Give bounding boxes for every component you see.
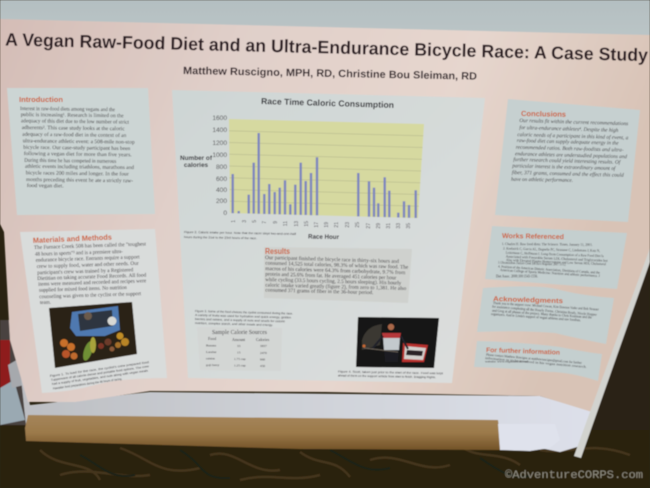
- text: references: 2. Koebnick C, Garcia AL, Dagnelie PC, Strassner C, Lindemans J, Katz N,: [503, 247, 600, 254]
- text: acknowledgments body: [491, 301, 600, 322]
- table: sample calorie sources: Banana: [206, 344, 217, 348]
- table: sample calorie sources: 3837: [260, 344, 267, 348]
- x axis labels: 35: [406, 223, 412, 229]
- text: methods body: crew to supply food, water and other needs. Our: [37, 260, 139, 270]
- x axis labels: 19: [324, 222, 330, 228]
- panel: for further information: [474, 341, 602, 381]
- white display pole: [574, 248, 650, 458]
- text: conclusions body: raw-food diet can supply adequate energy in the: [517, 137, 619, 147]
- text: conclusions body: caloric needs of a participant in this kind of event, a: [517, 131, 629, 141]
- title: A Vegan Raw-Food Diet and an Ultra-Endurance Bicycle Race: A Case Study: [5, 30, 648, 65]
- figure 1 caption: Tupperware of all calorie-dense and portable food options. The crew: [51, 364, 150, 382]
- text: references: Leitzmann C, Hoffmann I. Long-Term Consumption of a Raw Food Diet Is: [506, 251, 604, 259]
- text: further information body: website: www.veganhealth.com: [485, 360, 528, 364]
- text: introduction body: following a vegan diet for more than five years.: [24, 150, 132, 158]
- text: references: [496, 242, 608, 278]
- table: sample calorie sources: 960: [260, 358, 265, 362]
- table: sample calorie sources: Food: [208, 336, 216, 341]
- y axis labels: 1400: [212, 127, 227, 134]
- x axis labels: 13: [294, 221, 300, 227]
- text: introduction body: Interest in raw-food diets among vegans and the: [20, 105, 116, 113]
- text: results body: while cycling (33.5 hours cycling, 2.5 hours sleeping). His hourly: [265, 276, 402, 287]
- text: methods body: Dietitian on taking accurate Food Records. All food: [37, 272, 147, 282]
- text: acknowledgments body: Thank you to the support crew: Michael Cowan, Kim Dawson Vader and Bob Strasser: [493, 301, 600, 313]
- x axis labels: 11: [283, 221, 289, 226]
- table: sample calorie sources: goji berry: [206, 363, 220, 367]
- y axis labels: [212, 115, 227, 217]
- panel: materials and methods: [20, 229, 167, 393]
- y axis labels: 800: [216, 164, 227, 171]
- text: introduction body: athletic events including triathlons, marathons and: [25, 164, 134, 171]
- text: introduction body: public is increasing¹. Research is limited on the: [21, 112, 124, 119]
- text: methods body: endurance bicycle race. Entrants require a support: [36, 254, 140, 264]
- text: references: 1. Charles H. Raw food diets: The Science. Times. January 11, 2001.: [502, 242, 593, 248]
- text: introduction body: bicycle race. Our case-study participant has been: [23, 145, 131, 152]
- y axis labels: 200: [216, 198, 227, 205]
- text: results body: macros of his calories were 64.3% from carbohydrate, 9.7% from: [265, 265, 406, 276]
- text: conclusions body: Our results fit within the current recommendations: [519, 117, 628, 127]
- text: introduction body: adherents². This case study looks at the caloric: [22, 125, 125, 132]
- figure 3 caption: nutrition, complex starch, and other meals and energy.: [195, 321, 273, 327]
- figure 1 caption: had a supply of fruit, vegetables, and nuts along with vegan meals: [52, 368, 149, 386]
- text: further information body: information or to be involved in his vegan nutrition research.: [485, 356, 587, 369]
- text: introduction body: adequacy of this diet due to the low number of strict: [21, 117, 130, 126]
- x axis labels: 23: [345, 222, 351, 228]
- text: results body: caloric intake varied greatly (figure 2), from zero to 1,381. He also: [265, 282, 407, 292]
- heading: conclusions: Conclusions: [521, 109, 566, 119]
- text: methods body: items were measured and recorded and recipes were: [38, 278, 147, 288]
- table: sample calorie sources: 1.25 cup: [234, 364, 246, 368]
- x axis labels: 7: [262, 221, 268, 224]
- x axis labels: 33: [396, 223, 402, 229]
- figure 2 caption: Figure 2. Caloric intake per hour. Note that the racer slept two-and-one-half: [184, 230, 296, 236]
- y axis title: Number of: [180, 155, 213, 162]
- x axis labels: 15: [304, 221, 310, 227]
- figure 1: food photo: [49, 302, 137, 368]
- wall background: [0, 0, 650, 60]
- table: sample calorie sources: 15: [237, 350, 241, 354]
- dark room at right: [570, 245, 650, 430]
- text: acknowledgments body: and Greg at all phases of the project. Many thanks to Chris Kostman and the: [492, 309, 592, 319]
- heading: acknowledgments: Acknowledgments: [493, 296, 563, 305]
- text: conclusions body: for ultra-endurance athletes⁴. Despite the high: [519, 124, 619, 134]
- table: sample calorie sources: 1.75 cup: [234, 357, 246, 361]
- x axis labels: [231, 220, 412, 229]
- figure 1 caption: [50, 360, 150, 390]
- figure 2 caption: hours during the 21st to the 23rd hours of the race.: [184, 235, 257, 240]
- paper roll end: [498, 424, 560, 451]
- x axis labels: 1: [231, 220, 237, 223]
- lower left background clutter: [0, 320, 26, 425]
- panel: acknowledgments: [477, 286, 614, 344]
- chart: race time caloric consumption: [180, 96, 424, 241]
- figure 1 caption: Hawaiian food preparations during the 48 hours of racing.: [53, 377, 123, 390]
- text: methods body: team.: [40, 300, 51, 306]
- hanging paper below poster: [17, 340, 595, 452]
- text: methods body: 48 hours in sports"³ and is a premiere ultra-: [35, 249, 123, 258]
- x axis labels: 21: [334, 222, 340, 228]
- x axis labels: 9: [273, 221, 279, 224]
- y axis labels: 1200: [212, 140, 227, 147]
- figure 3 caption: Figure 3. Some of the food choices the cyclist consumed during the race.: [195, 309, 293, 316]
- text: methods body: [34, 241, 147, 306]
- text: results body: protein and 25.6% from fat. He averaged 451 calories per hour: [265, 271, 397, 281]
- bars: [233, 133, 416, 218]
- table: sample calorie sources: Larabar: [206, 350, 217, 354]
- text: results body: consumed 14,525 total calories, 98.3% of which was raw food. The: [265, 260, 409, 271]
- panel: works referenced: [485, 226, 627, 289]
- watermark: ©AdventureCORPS.com: [505, 470, 643, 482]
- x axis labels: 5: [252, 220, 258, 223]
- table: sample calorie sources: [197, 327, 282, 371]
- text: acknowledgments body: organizers. And to Linda's support of vegan athletes and raw foodists.: [491, 312, 581, 322]
- heading: results: Results: [265, 247, 290, 256]
- table: sample calorie sources: Calories: [256, 337, 270, 342]
- panel: introduction: [7, 88, 155, 215]
- table: sample calorie sources: Sample Calorie Sources: [212, 330, 268, 336]
- x axis labels: 31: [386, 223, 392, 229]
- y axis title: calories: [184, 162, 209, 169]
- text: introduction body: ultra-endurance athletic event: a 508-mile non-stop: [23, 138, 135, 146]
- plot area: [229, 119, 424, 218]
- text: introduction body: months preceding this event he ate a strictly raw-: [26, 177, 133, 184]
- y axis labels: 1600: [212, 115, 227, 122]
- figure 3 caption: A variety of fruits was used for hydration and quick energy, golden: [195, 313, 291, 320]
- results box: [264, 247, 412, 303]
- text: references: American College of Sports Medicine: Nutrition and athletic performance. J: [500, 268, 601, 278]
- figure 4: cyclist photo: [356, 317, 439, 368]
- y axis title: [180, 155, 213, 169]
- text: references: Also with Elevated Plasma Homocysteine and Low Serum HDL Cholesterol: [506, 258, 606, 266]
- x axis labels: 25: [355, 222, 361, 228]
- text: introduction body: food vegan diet.: [27, 182, 64, 189]
- text: conclusions body: particular interest is the extraordinary amount of: [511, 162, 617, 172]
- text: introduction body: During this time he has competed in numerous: [24, 158, 116, 165]
- text: conclusions body: further research could yield interesting results. Of: [513, 156, 622, 166]
- table: sample calorie sources: Amount: [232, 337, 246, 342]
- text: results body: Our participant finished the bicycle race in thirty-six hours and: [265, 254, 399, 265]
- authors: Matthew Ruscigno, MPH, RD, Christine Bou Sleiman, RD: [183, 65, 478, 83]
- x axis labels: 29: [376, 223, 382, 229]
- y axis labels: 1000: [212, 152, 227, 159]
- y axis labels: 600: [216, 176, 227, 183]
- table: sample calorie sources: 2470: [260, 351, 267, 355]
- figure 3 caption: [195, 309, 293, 327]
- text: conclusions body: fiber, 371 grams, consumed and the effect this could: [512, 169, 624, 179]
- table: sample calorie sources: 450: [260, 364, 265, 368]
- heading: introduction: Introduction: [19, 95, 63, 104]
- text: conclusions body: [511, 117, 629, 184]
- panel: results and chart: [172, 90, 485, 383]
- carpet floor: [0, 410, 650, 488]
- text: results body: consumed 371 grams of fiber in the 36-hour period.: [265, 287, 373, 296]
- text: methods body: supplied for mixed food items. No nutrition: [39, 284, 127, 294]
- x axis title: Race Hour: [308, 234, 340, 241]
- table: sample calorie sources: 33: [237, 344, 241, 348]
- text: conclusions body: have on athletic performance.: [511, 176, 573, 184]
- figure 4 caption: Figure 4. Scott, taken just prior to the start of the race. Food was kept: [338, 370, 443, 375]
- text: conclusions body: endurance athletes are understudied populations and: [515, 151, 627, 160]
- text: methods body: The Furnace Creek 508 has been called the "toughest: [34, 241, 146, 251]
- text: references: Diet Assoc. 2000;100:1543-1556.: [496, 274, 538, 278]
- x axis labels: 3: [242, 220, 248, 223]
- figure 1 caption: Figure 1. To load for the race, the cyclist's crew prepared food: [50, 360, 150, 378]
- figure 2 caption: [184, 230, 296, 240]
- y axis labels: 0: [223, 210, 227, 217]
- cardboard tube: [25, 415, 502, 450]
- x axis labels: 17: [314, 222, 320, 228]
- text: introduction body: bicycle races 200 miles and longer. In the four: [26, 169, 129, 178]
- text: results body: [265, 254, 409, 296]
- text: conclusions body: recommended ratios. Both raw-foodists and ultra-: [516, 144, 624, 154]
- text: references: 3. Ultramarathon. Furnace Creek 508 Race Magazine. 2007: 11-12.: [498, 261, 566, 267]
- table: sample calorie sources: raisins: [206, 356, 216, 360]
- text: introduction body: adequacy of a raw-food diet in the context of an: [22, 131, 127, 139]
- figure 4 caption: [338, 370, 443, 379]
- heading: for further information: For further information: [486, 347, 560, 357]
- text: references: 4. Position of the American Dietetic Association, Dietitians of Canada, and the: [498, 265, 600, 276]
- figure 3 caption: berries and raisins, and a supply of nuts and seeds for calorie: [195, 317, 285, 323]
- panel: conclusions: [495, 99, 640, 222]
- chart title: Race Time Caloric Consumption: [261, 96, 394, 110]
- text: methods body: participant's crew was trained by a Registered: [37, 267, 134, 276]
- y axis labels: 400: [216, 187, 227, 194]
- heading: works referenced: Works Referenced: [502, 233, 564, 241]
- text: introduction body: [20, 105, 135, 189]
- x axis labels: 27: [366, 223, 372, 229]
- heading: materials and methods: Materials and Methods: [33, 233, 112, 245]
- figure 4 caption: ahead of them on the support vehicle from start to finish. Bragging Rights.: [338, 374, 436, 379]
- text: references: Associated with Favorable Serum LDL Cholesterol and Triglycerides but: [506, 255, 608, 263]
- text: acknowledgments body: for assistance completing all the Hourly Forms. Christina Roufy, Nicole Hopper: [492, 305, 598, 318]
- text: methods body: counseling was given to the cyclist or the support: [39, 291, 142, 300]
- text: further information body: Please contact Matthew Ruscigno at matthewruscigno@gmail.com for further: [486, 353, 583, 365]
